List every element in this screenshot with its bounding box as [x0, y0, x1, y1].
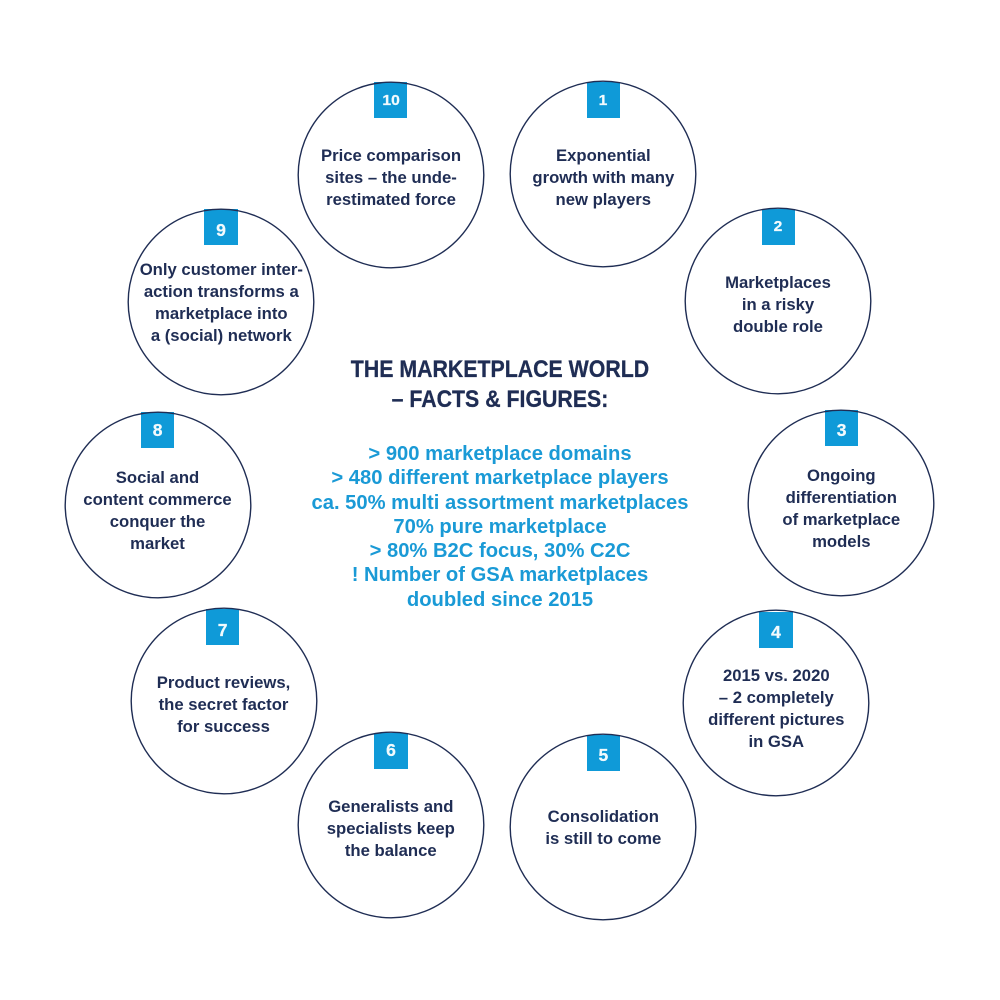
item 2: risky double role — [684, 208, 872, 394]
item 6: generalists and specialists: specialists keep — [327, 819, 455, 838]
item 5: consolidation — [510, 734, 696, 920]
item 3: differentiation: 3 — [837, 420, 846, 440]
key facts: 70% pure marketplace — [393, 516, 607, 538]
item 6: generalists and specialists: 6 — [386, 740, 396, 760]
item 3: differentiation: Ongoing — [807, 466, 876, 485]
item 8: social and content commerce — [64, 412, 252, 598]
item 5: consolidation: is still to come — [545, 829, 661, 848]
item 3: differentiation: of marketplace — [782, 510, 900, 529]
item 8: social and content commerce: 8 — [153, 420, 163, 440]
item 4: 2015 vs 2020 — [682, 610, 870, 796]
key facts: ! Number of GSA marketplaces — [352, 564, 648, 586]
key facts: doubled since 2015 — [407, 589, 593, 611]
item 9: customer interaction — [128, 208, 314, 396]
item 1: exponential growth: 1 — [599, 93, 608, 109]
item 1: exponential growth: new players — [556, 190, 651, 209]
item 7: product reviews: Product reviews, — [157, 673, 290, 692]
item 10: price comparison: 10 — [382, 93, 399, 109]
item 6: generalists and specialists: Generalists and — [328, 797, 453, 816]
item 9: customer interaction: 9 — [216, 220, 226, 240]
item 8: social and content commerce: conquer the — [110, 512, 205, 530]
item 5: consolidation: 5 — [598, 745, 608, 765]
key facts: ca. 50% multi assortment marketplaces — [311, 492, 688, 514]
item 3: differentiation — [748, 410, 934, 596]
item 10: price comparison: Price comparison — [321, 146, 461, 165]
key facts: > 80% B2C focus, 30% C2C — [370, 540, 630, 562]
item 7: product reviews: for success — [177, 717, 270, 736]
item 7: product reviews: the secret factor — [159, 695, 288, 714]
item 2: risky double role: 2 — [774, 219, 783, 235]
item 1: exponential growth: Exponential — [556, 146, 651, 165]
item 1: exponential growth: growth with many — [532, 168, 674, 187]
item 5: consolidation: Consolidation — [548, 807, 659, 826]
item 10: price comparison: sites – the unde- — [325, 168, 457, 187]
item 4: 2015 vs 2020: different pictures — [708, 710, 844, 729]
key facts: > 480 different marketplace players — [331, 467, 669, 489]
item 4: 2015 vs 2020: 4 — [771, 622, 781, 642]
title: – FACTS & FIGURES: — [392, 386, 608, 412]
item 9: customer interaction: Only customer inter- — [140, 260, 303, 279]
item 9: customer interaction: a (social) network — [151, 326, 292, 345]
key facts — [311, 443, 688, 611]
item 10: price comparison — [298, 82, 484, 268]
item 1: exponential growth — [510, 80, 696, 268]
item 8: social and content commerce: market — [130, 534, 185, 552]
item 6: generalists and specialists: the balance — [345, 841, 437, 860]
item 9: customer interaction: marketplace into — [155, 304, 288, 323]
key facts: > 900 marketplace domains — [368, 443, 632, 465]
item 3: differentiation: differentiation — [786, 488, 897, 507]
item 10: price comparison: restimated force — [326, 190, 456, 209]
title: THE MARKETPLACE WORLD — [351, 356, 649, 382]
item 2: risky double role: in a risky — [742, 294, 814, 314]
item 2: risky double role: double role — [733, 316, 823, 336]
item 4: 2015 vs 2020: 2015 vs. 2020 — [723, 666, 830, 685]
item 4: 2015 vs 2020: – 2 completely — [719, 688, 834, 707]
title — [350, 356, 649, 412]
item 6: generalists and specialists — [298, 732, 484, 918]
item 8: social and content commerce: content commerce — [83, 490, 232, 508]
item 4: 2015 vs 2020: in GSA — [748, 732, 804, 751]
item 9: customer interaction: action transforms a — [144, 282, 299, 301]
item 7: product reviews: 7 — [218, 620, 228, 640]
item 2: risky double role: Marketplaces — [725, 272, 831, 292]
item 7: product reviews — [130, 608, 318, 794]
item 8: social and content commerce: Social and — [116, 468, 199, 486]
item 3: differentiation: models — [812, 532, 871, 551]
